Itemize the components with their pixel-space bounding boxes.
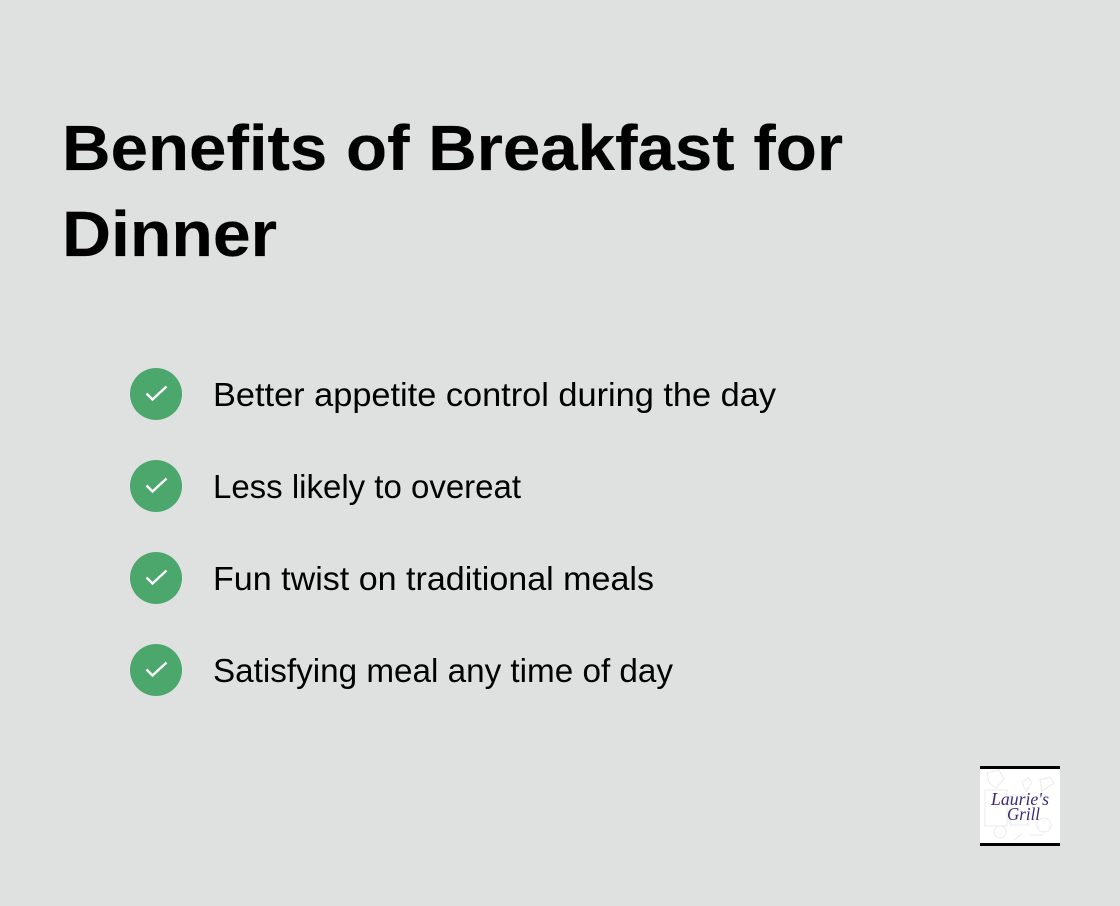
list item: overeating [130, 460, 521, 512]
list item: satisfying meal: Satisfying meal any time of day [213, 652, 673, 689]
logo sketch background [985, 770, 1054, 840]
list item: appetite control [130, 368, 777, 420]
title: Dinner [62, 198, 277, 270]
title: Benefits of Breakfast for [62, 112, 843, 184]
title [62, 112, 843, 270]
list item: fun twist: Fun twist on traditional meals [213, 560, 654, 597]
list item: fun twist [130, 552, 654, 604]
list item: satisfying meal [130, 644, 673, 696]
logo wordmark: Laurie's [990, 789, 1049, 809]
logo wordmark [990, 789, 1049, 824]
list item: appetite control: Better appetite control during the day [213, 376, 777, 413]
benefits checklist [130, 368, 777, 696]
logo wordmark: Grill [1007, 804, 1040, 824]
logo: Laurie's Grill [980, 766, 1060, 846]
list item: overeating: Less likely to overeat [213, 468, 521, 505]
